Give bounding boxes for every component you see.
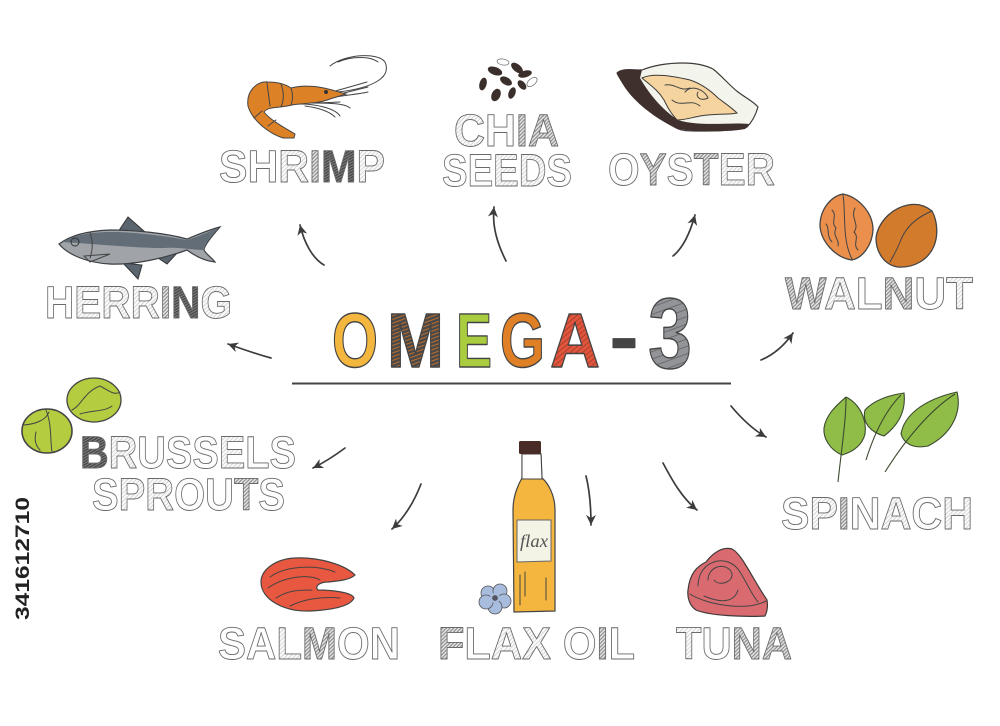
- arrow: to salmon: [392, 484, 421, 529]
- icon: flax oil bottle: [479, 441, 555, 614]
- arrow: to brussels sprouts: [313, 448, 345, 468]
- main title: OMEGA-3: [332, 278, 692, 390]
- arrow: to oyster: [673, 215, 695, 256]
- icon: brussels sprouts: [22, 378, 121, 453]
- arrow: to chia seeds: [494, 207, 506, 261]
- label: BRUSSELS SPROUTS: [80, 427, 296, 520]
- label: HERRING: HERRING: [45, 277, 232, 328]
- icon: tuna steak: [688, 548, 767, 616]
- icon: flax oil bottle: flax: [520, 531, 548, 551]
- label: SALMON: SALMON: [218, 618, 400, 669]
- icon: oyster: [617, 63, 758, 131]
- label: SPINACH: SPINACH: [781, 488, 973, 539]
- label: OYSTER: OYSTER: [608, 144, 775, 195]
- stock image number: 341612710: [13, 497, 34, 620]
- main title: OMEGA-3: A: [550, 298, 600, 384]
- arrow: to herring: [228, 344, 271, 358]
- label: BRUSSELS SPROUTS: SPROUTS: [92, 469, 285, 520]
- main title: OMEGA-3: 3: [648, 278, 692, 390]
- main title: OMEGA-3: E: [456, 298, 492, 384]
- main title: OMEGA-3: G: [500, 298, 545, 384]
- arrow: to flax oil: [586, 476, 591, 525]
- icon: spinach leaves: [824, 392, 958, 482]
- icon: herring: [59, 217, 220, 279]
- icon: chia seeds: [478, 58, 539, 103]
- icon: shrimp: [248, 56, 386, 138]
- icon: walnuts: [820, 194, 937, 267]
- label: BRUSSELS SPROUTS: BRUSSELS: [80, 427, 296, 478]
- label: CHIA SEEDS: [442, 105, 572, 196]
- icon: salmon steak: [261, 558, 355, 611]
- arrow: to walnut: [761, 333, 793, 360]
- label: FLAX OIL: FLAX OIL: [438, 618, 635, 669]
- main title: OMEGA-3: M: [387, 298, 444, 384]
- label: CHIA SEEDS: SEEDS: [442, 145, 572, 196]
- label: WALNUT: WALNUT: [785, 268, 973, 319]
- arrow: to tuna: [663, 463, 697, 510]
- title underline: [292, 382, 731, 384]
- label: TUNA: TUNA: [676, 618, 792, 669]
- main title: OMEGA-3: O: [332, 298, 378, 384]
- main title: OMEGA-3: -: [610, 298, 638, 378]
- label: CHIA SEEDS: CHIA: [454, 105, 559, 156]
- arrow: to spinach: [731, 406, 766, 437]
- arrow: to shrimp: [300, 225, 324, 265]
- label: SHRIMP: SHRIMP: [219, 141, 385, 192]
